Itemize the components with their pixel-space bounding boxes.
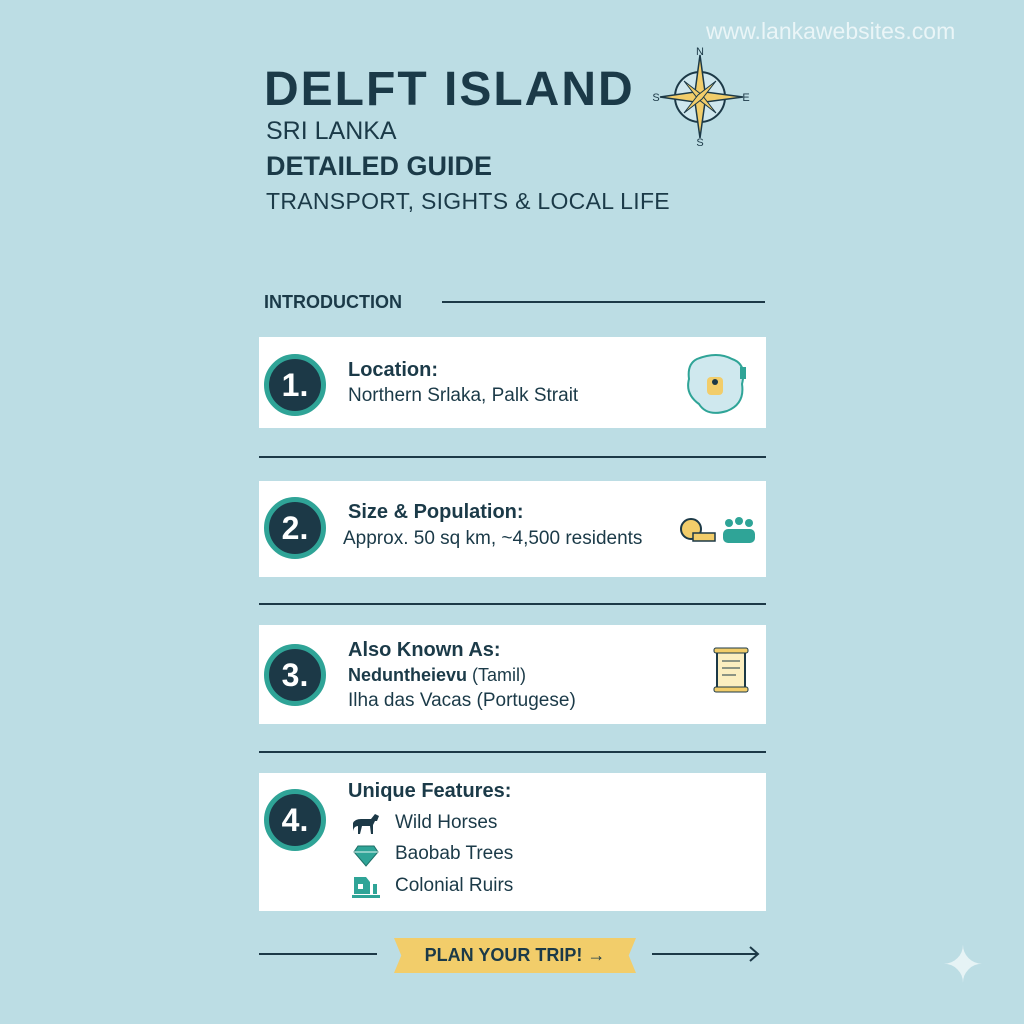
watermark: www.lankawebsites.com	[706, 18, 955, 44]
icon: tape measure and people	[680, 517, 755, 543]
panel: size and population: Approx. 50 sq km, ~4,500 residents	[343, 528, 642, 549]
decorative sparkle: ✦	[942, 937, 984, 993]
panel: also known as: Also Known As:	[348, 639, 501, 661]
text: PLAN YOUR TRIP! →	[425, 945, 605, 965]
panel: size and population	[259, 481, 766, 577]
icon: horse	[353, 814, 379, 834]
heading: detailed guide: DETAILED GUIDE	[266, 151, 492, 181]
section heading: introduction: INTRODUCTION	[264, 292, 402, 312]
icon: compass: E	[742, 92, 750, 104]
subtitle: SRI LANKA	[266, 117, 397, 145]
icon: diamond	[353, 846, 378, 867]
panel: unique features: 4.	[282, 802, 308, 838]
icon: compass: S	[652, 92, 660, 104]
panel: location: Northern Srlaka, Palk Strait	[348, 385, 578, 406]
icon: scroll	[714, 648, 748, 692]
panel: location: 1.	[282, 367, 308, 403]
panel: location	[259, 337, 766, 428]
icon: island map	[687, 354, 746, 414]
icon: ruins	[352, 877, 380, 898]
panel: unique features: Colonial Ruirs	[395, 875, 513, 896]
icon: compass: S	[696, 137, 704, 149]
panel: also known as: Neduntheievu (Tamil)	[348, 665, 526, 685]
call to action banner	[259, 953, 377, 955]
panel: location: Location:	[348, 359, 438, 381]
panel: also known as	[259, 625, 766, 724]
panel: also known as: 3.	[282, 657, 308, 693]
panel: also known as: Ilha das Vacas (Portugese)	[348, 690, 576, 711]
panel: size and population: Size & Population:	[348, 501, 524, 523]
panel: unique features	[259, 773, 766, 911]
panel: unique features: Baobab Trees	[395, 843, 513, 864]
icon: compass	[652, 46, 750, 149]
panel: unique features: Unique Features:	[348, 780, 511, 802]
title: DELFT ISLAND	[264, 63, 635, 116]
panel: size and population: 2.	[282, 510, 308, 546]
icon: compass: N	[696, 46, 704, 58]
tagline: TRANSPORT, SIGHTS & LOCAL LIFE	[266, 188, 670, 214]
panel: unique features: Wild Horses	[395, 812, 497, 833]
arrow	[652, 946, 760, 962]
